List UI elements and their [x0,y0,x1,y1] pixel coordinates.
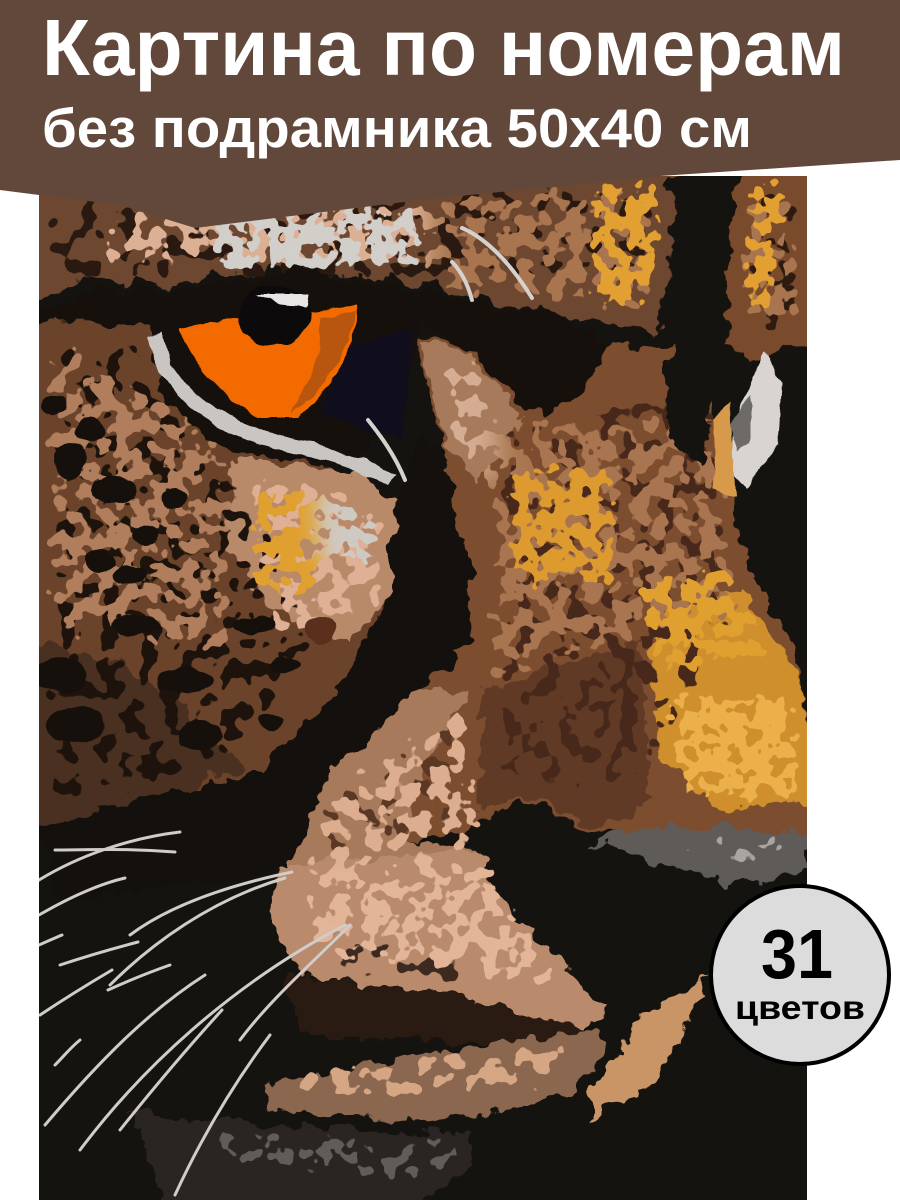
eye [155,286,392,480]
colours label: цветов [735,989,865,1026]
navy shadow next to eye [320,330,412,440]
colour count badge [711,886,889,1064]
eye highlight [256,295,308,306]
fur base colour regions [20,170,830,1200]
subtitle: без подрамника 50х40 см [42,97,752,159]
orange and grey speckles [205,176,807,810]
painting: leopard face close-up [20,170,830,1200]
dark vertical stripe [662,176,738,470]
whiskers [39,832,350,1195]
title: Картина по номерам [42,3,845,92]
iris shading [290,312,356,415]
iris [180,306,357,418]
header banner [0,0,900,228]
pupil [238,286,310,346]
muzzle-side white patch [712,350,782,495]
number of colours: 31 [761,915,833,993]
dark band between cheek and muzzle [39,440,472,900]
dark band around eye [39,268,612,462]
cheek spots [34,395,336,750]
dark speckles [39,176,807,1010]
eye rim [155,335,392,480]
light peach speckles [39,180,807,1190]
forehead white marks [368,228,532,480]
